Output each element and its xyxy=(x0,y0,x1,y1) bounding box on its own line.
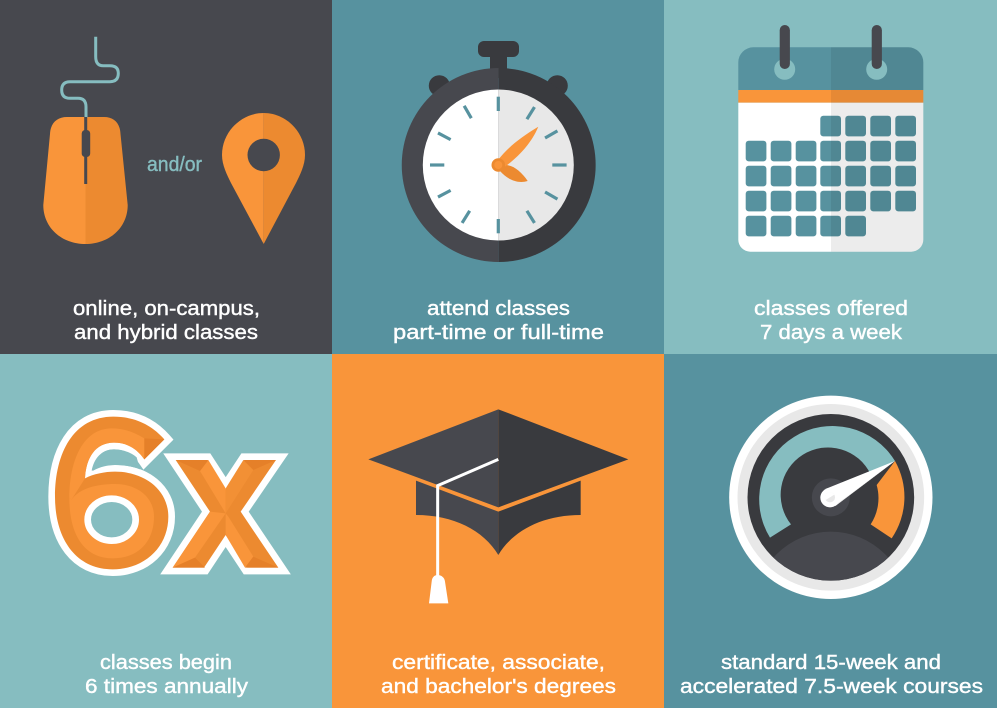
panel: attend classes part-time or full-time xyxy=(332,0,664,354)
icon: 6x numeral xyxy=(55,417,278,569)
panel: certificate, associate, and bachelor's degrees xyxy=(332,354,664,708)
panel: standard 15-week and accelerated 7.5-week courses xyxy=(664,354,997,708)
caption: classes offered 7 days a week: classes offered xyxy=(754,297,908,320)
caption: certificate, associate, and bachelor's degrees: and bachelor's degrees xyxy=(381,675,616,698)
caption: attend classes part-time or full-time: part-time or full-time xyxy=(393,321,604,344)
panel: classes begin 6 times annually xyxy=(0,354,332,708)
icon: speedometer xyxy=(729,396,932,599)
label: and/or: and/or xyxy=(147,154,202,176)
panel: classes offered 7 days a week xyxy=(664,0,997,354)
caption: standard 15-week and accelerated 7.5-week courses: accelerated 7.5-week courses xyxy=(680,675,983,698)
icon: stopwatch xyxy=(402,41,596,262)
panel: online, on-campus, and hybrid classes xyxy=(0,0,332,354)
caption: online, on-campus, and hybrid classes: and hybrid classes xyxy=(74,321,258,344)
caption: online, on-campus, and hybrid classes: online, on-campus, xyxy=(73,297,260,320)
caption: standard 15-week and accelerated 7.5-week courses: standard 15-week and xyxy=(721,651,941,674)
icon: map pin xyxy=(222,113,305,244)
caption: attend classes part-time or full-time: attend classes xyxy=(427,297,570,320)
caption: certificate, associate, and bachelor's degrees: certificate, associate, xyxy=(392,651,605,674)
icon: graduation cap xyxy=(368,409,628,603)
icon: calendar xyxy=(738,25,924,253)
caption: classes offered 7 days a week: 7 days a week xyxy=(760,321,903,344)
caption: classes begin 6 times annually: 6 times annually xyxy=(85,675,249,698)
caption: classes begin 6 times annually: classes begin xyxy=(100,651,232,674)
icon: computer mouse xyxy=(43,37,128,244)
